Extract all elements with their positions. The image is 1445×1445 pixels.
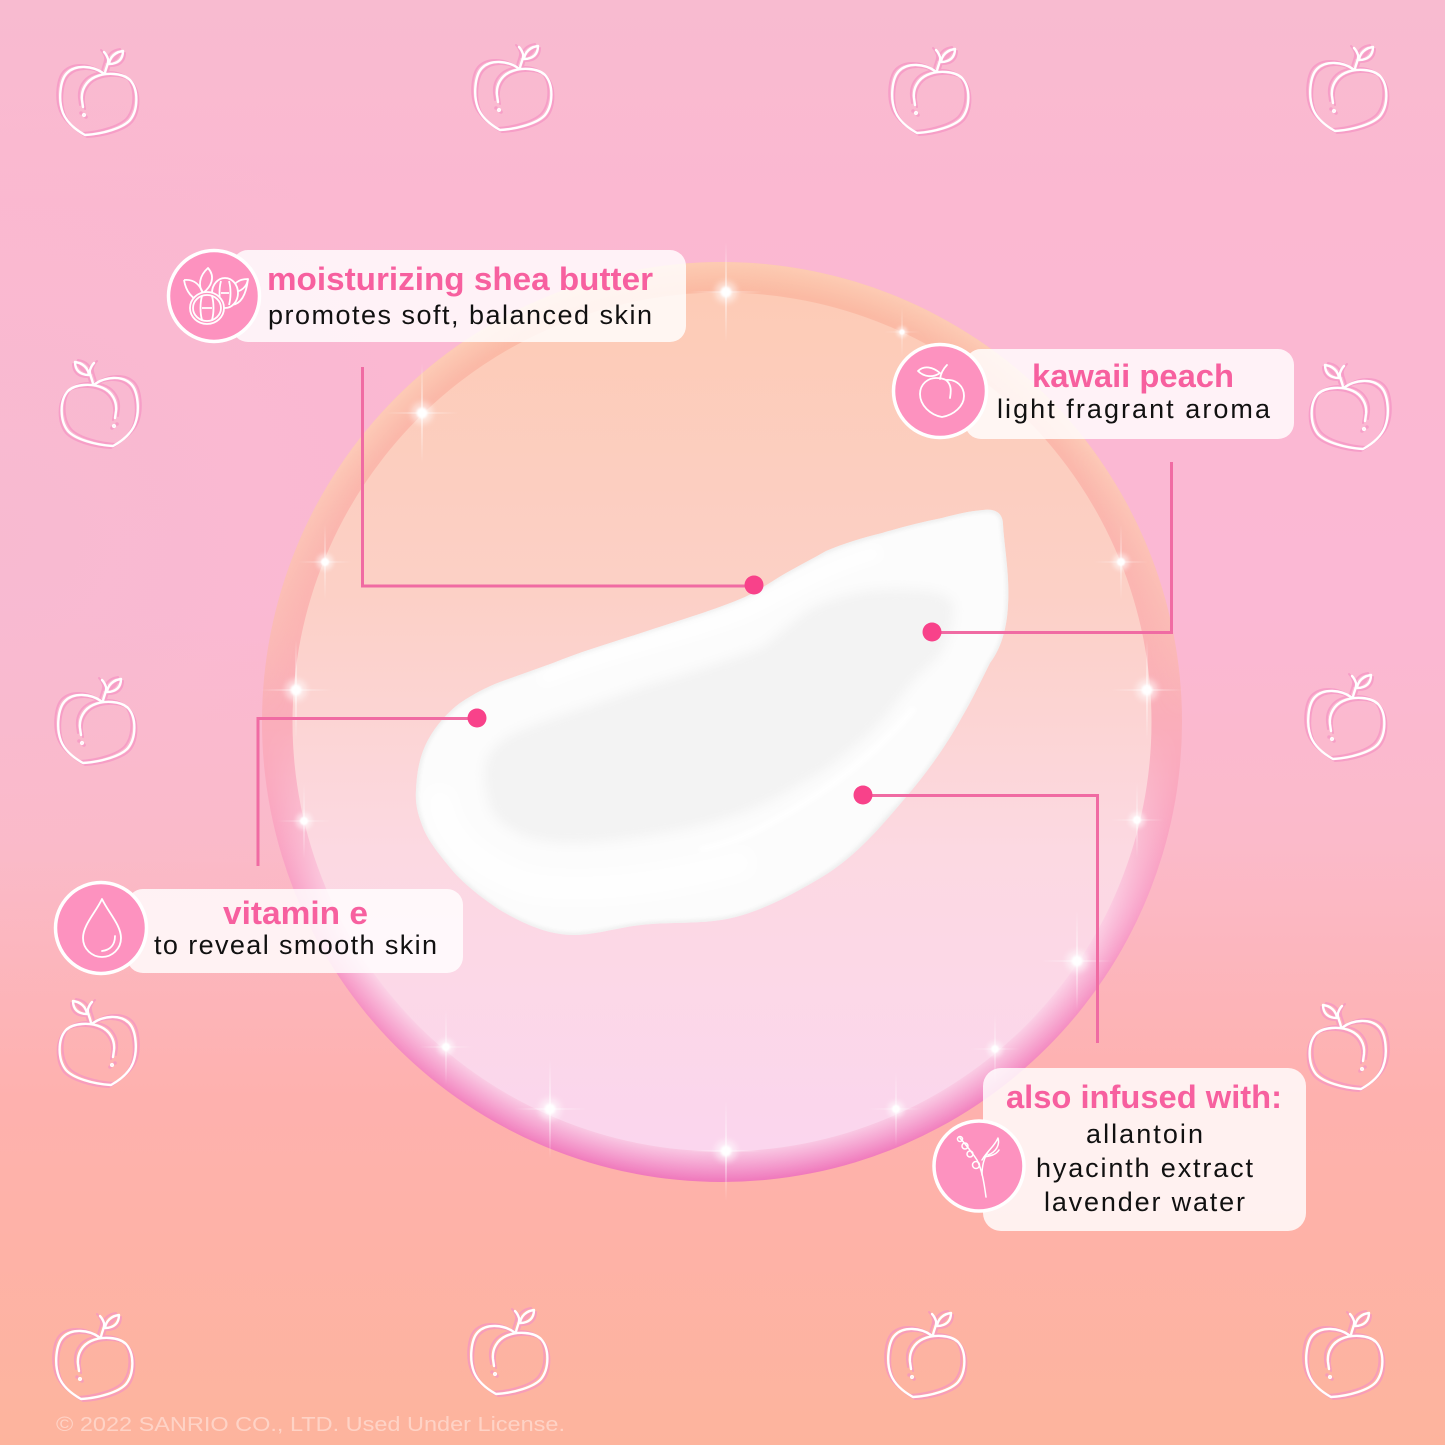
icon: peach <box>894 344 986 438</box>
callout: moisturizing shea butter <box>168 250 686 342</box>
cream swatch <box>416 510 1008 935</box>
description: promotes soft, balanced skin <box>268 300 652 330</box>
heading: also infused with: <box>1006 1079 1282 1115</box>
copyright notice: © 2022 SANRIO CO., LTD. Used Under License. <box>56 1414 565 1436</box>
ingredient: hyacinth extract: hyacinth extract <box>1036 1153 1253 1183</box>
callout: vitamin e <box>56 882 463 974</box>
icon: lavender sprig <box>934 1121 1024 1211</box>
large gradient circle <box>262 262 1182 1182</box>
heading: kawaii peach <box>1032 358 1234 394</box>
connector: also infused with <box>854 786 1098 1043</box>
connector: vitamin e <box>258 708 486 866</box>
description: light fragrant aroma <box>997 394 1271 424</box>
icon: shea nuts and leaves <box>168 250 260 342</box>
connector: kawaii peach <box>922 462 1172 642</box>
description: to reveal smooth skin <box>154 930 437 960</box>
connector: shea butter <box>362 367 764 594</box>
icon: water drop <box>56 882 146 974</box>
heading: vitamin e <box>223 895 368 931</box>
callout: kawaii peach <box>894 344 1294 439</box>
sparkles on circle <box>260 242 1183 1201</box>
callout: also infused with <box>934 1068 1306 1231</box>
ingredient: allantoin: allantoin <box>1086 1119 1203 1149</box>
heading: moisturizing shea butter <box>267 261 653 297</box>
ingredient: lavender water: lavender water <box>1044 1187 1245 1217</box>
